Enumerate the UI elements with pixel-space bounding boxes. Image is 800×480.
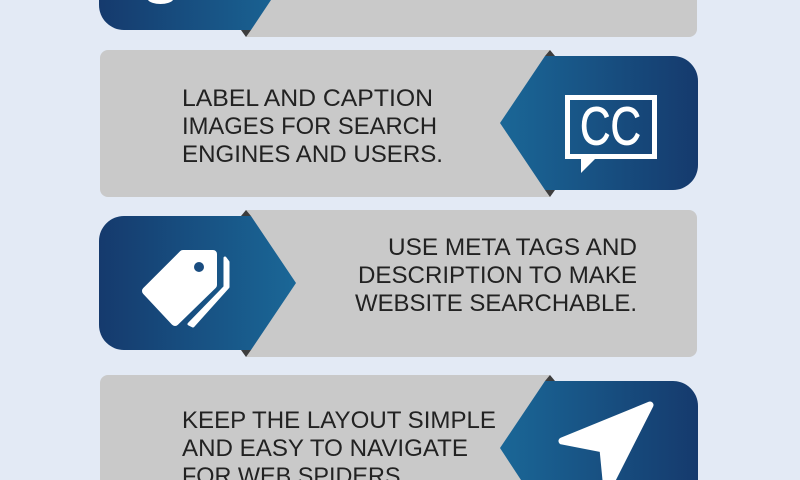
panel: meta tags bbox=[99, 210, 697, 357]
fold triangles bbox=[241, 210, 251, 357]
text block: LABEL AND CAPTION bbox=[182, 85, 433, 112]
text block: USE META TAGS AND bbox=[388, 234, 637, 261]
text block: DESCRIPTION TO MAKE bbox=[358, 262, 637, 289]
blue tab bbox=[500, 56, 698, 190]
icon: closed captions bbox=[568, 96, 654, 173]
gray card bbox=[100, 50, 550, 197]
blue tab bbox=[99, 216, 296, 350]
text block: IMAGES FOR SEARCH bbox=[182, 113, 437, 140]
fold triangle bbox=[545, 375, 555, 381]
panel: top step (cropped) bbox=[99, 0, 697, 37]
gray card bbox=[246, 210, 697, 357]
icon: price tags bbox=[146, 254, 228, 326]
fold triangle top bbox=[241, 30, 251, 37]
fold triangles bbox=[545, 50, 555, 197]
blue tab top bbox=[99, 0, 271, 30]
text block: KEEP THE LAYOUT SIMPLE bbox=[182, 407, 496, 434]
icon: navigation arrow bbox=[562, 405, 650, 480]
gray card bbox=[100, 375, 550, 480]
icon: cropped white shape bbox=[148, 0, 173, 4]
icon: closed captions: CC bbox=[580, 96, 641, 156]
text block: WEBSITE SEARCHABLE. bbox=[355, 290, 637, 317]
gray card top bbox=[241, 0, 697, 37]
panel: label and caption images bbox=[100, 50, 698, 197]
text block: ENGINES AND USERS. bbox=[182, 141, 443, 168]
text block: AND EASY TO NAVIGATE bbox=[182, 435, 468, 462]
blue tab bbox=[500, 381, 698, 480]
panel: simple layout bbox=[100, 375, 698, 480]
